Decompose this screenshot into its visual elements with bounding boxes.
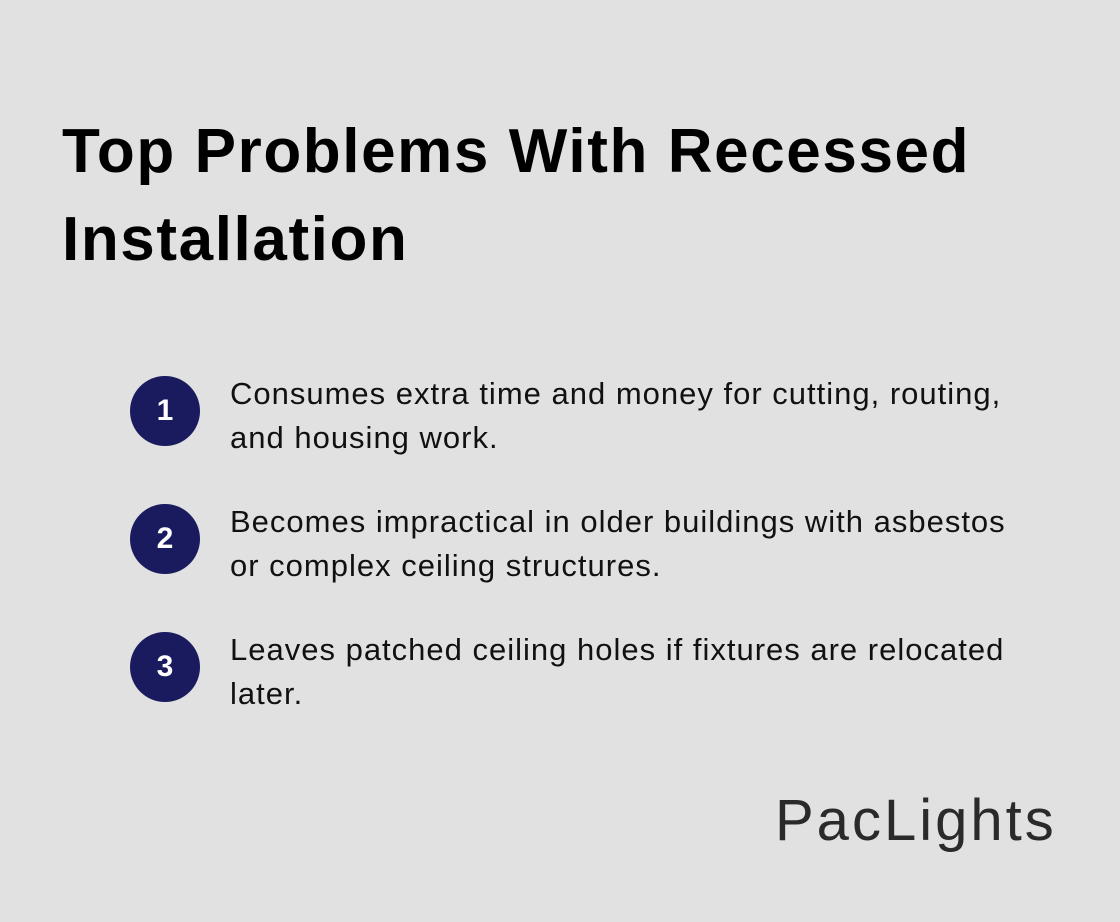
- item 3: [130, 632, 1004, 711]
- logo: PacLights: [775, 788, 1057, 853]
- text 1: and housing work.: [230, 420, 499, 455]
- item 1: [130, 376, 1001, 455]
- title: Top Problems With Recessed: [62, 117, 970, 186]
- text 3: [230, 632, 1004, 711]
- title: [62, 117, 970, 274]
- text 2: [230, 504, 1006, 583]
- text 3: later.: [230, 676, 303, 711]
- text 1: Consumes extra time and money for cutting, routing,: [230, 376, 1001, 411]
- title: Installation: [62, 205, 408, 274]
- text 2: Becomes impractical in older buildings with asbestos: [230, 504, 1006, 539]
- badge 2: 2: [157, 522, 173, 555]
- text 3: Leaves patched ceiling holes if fixtures are relocated: [230, 632, 1004, 667]
- text 2: or complex ceiling structures.: [230, 548, 661, 583]
- badge 1: [130, 376, 200, 446]
- text 1: [230, 376, 1001, 455]
- badge 2: [130, 504, 200, 574]
- badge 1: 1: [157, 394, 173, 427]
- badge 3: 3: [157, 650, 173, 683]
- item 2: [130, 504, 1006, 583]
- badge 3: [130, 632, 200, 702]
